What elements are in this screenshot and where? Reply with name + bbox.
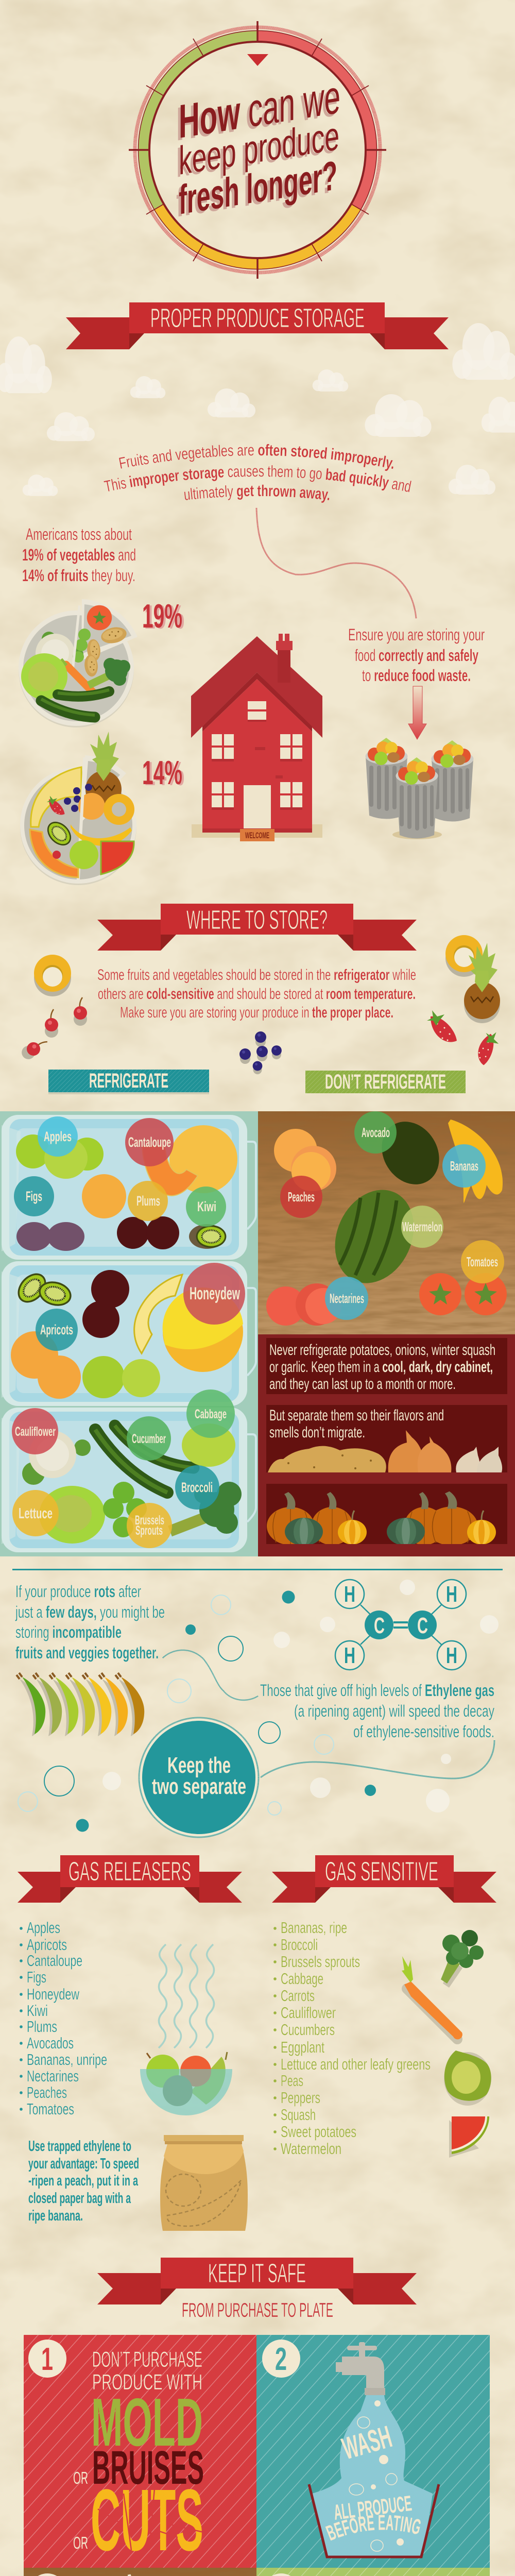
refrigerate labels: Plums: [136, 1193, 160, 1209]
banana ripening row: [16, 1673, 144, 1736]
don't refrigerate labels: [280, 1111, 504, 1320]
title: [176, 70, 340, 226]
title: How can we: [179, 70, 340, 148]
intro curved text: This improper storage causes them to go bad quickly and: [104, 465, 411, 493]
paragraph: where to store: [97, 967, 416, 1021]
title: keep produce: [179, 113, 339, 183]
list: gas sensitive: Carrots: [281, 1987, 315, 2005]
dotted divider: [12, 1569, 503, 1570]
icon: carrot: [402, 1956, 462, 2039]
list: gas releasers: Tomatoes: [27, 2100, 74, 2118]
don't refrigerate labels: Watermelon: [402, 1219, 442, 1234]
pointer triangle: [247, 54, 268, 66]
banner: proper produce storage: [66, 302, 449, 349]
list: gas sensitive: Cabbage: [281, 1970, 323, 1988]
icon: pear slice: [444, 2050, 491, 2106]
panel 1: don't purchase: PRODUCE WITH: [92, 2370, 202, 2395]
list: gas sensitive: Broccoli: [281, 1936, 318, 1954]
callout: keep the two separate: Keep the: [167, 1753, 231, 1778]
panel 1: don't purchase: BRUISES: [92, 2442, 204, 2494]
text: ethylene gas: [260, 1681, 494, 1741]
list: gas releasers: Figs: [27, 1968, 46, 1986]
scattered fruit right: [427, 935, 507, 1066]
potatoes onions garlic: [268, 1430, 502, 1472]
list: gas sensitive: Squash: [281, 2106, 316, 2124]
list: gas sensitive: Lettuce and other leafy greens: [281, 2055, 431, 2073]
list: gas sensitive: Sweet potatoes: [281, 2123, 356, 2141]
clouds: [0, 323, 515, 496]
banner: where to store: [97, 904, 417, 951]
title gauge ring: [129, 21, 386, 279]
panel 1: don't purchase: OR: [73, 2468, 88, 2487]
welcome mat: WELCOME: [245, 831, 269, 840]
paragraph: where to store: Make sure you are storing your produce in the proper place.: [120, 1004, 393, 1021]
list: gas releasers: Honeydew: [27, 1985, 79, 2003]
ethylene molecule: H: [344, 1643, 355, 1668]
tip: trapped ethylene: Use trapped ethylene to: [28, 2138, 131, 2155]
stat 14%: 14%: [144, 755, 184, 792]
list: gas releasers: Apricots: [27, 1936, 67, 1954]
refrigerate labels: Cabbage: [195, 1407, 227, 1421]
list: gas releasers: Apples: [27, 1919, 60, 1937]
ethylene molecule: H: [446, 1643, 457, 1668]
list: gas releasers: Plums: [27, 2018, 57, 2036]
gas vapour waves: [159, 1944, 214, 2048]
tip: trapped ethylene: ripe banana.: [28, 2208, 83, 2224]
don't refrigerate labels: Avocado: [362, 1125, 390, 1140]
panel 1: don't purchase: DON’T PURCHASE: [92, 2347, 202, 2372]
text: produce rots: storing incompatible: [15, 1623, 122, 1641]
stat 19%: 19%: [144, 598, 184, 636]
arrow down: [408, 686, 426, 739]
list: gas sensitive: Peas: [281, 2072, 303, 2090]
button: refrigerate: [48, 1070, 209, 1094]
panel 1: don't purchase: OR: [73, 2533, 88, 2552]
panel 2: wash: ALL PRODUCE: [332, 2491, 413, 2524]
fruit plate: [20, 732, 136, 885]
don't refrigerate labels: Peaches: [288, 1189, 315, 1205]
tip: trapped ethylene: -ripen a peach, put it in a: [28, 2173, 139, 2189]
list: gas releasers: Peaches: [27, 2083, 67, 2102]
text: produce rots: fruits and veggies together.: [15, 1643, 159, 1662]
cabinet text: [269, 1342, 495, 1441]
text: produce rots: just a few days, you might be: [15, 1603, 165, 1621]
text: americans toss: 14% of fruits they buy.: [22, 566, 135, 585]
panel: cabinet: [258, 1334, 515, 1556]
refrigerate labels: Honeydew: [190, 1284, 240, 1303]
callout: keep the two separate: [139, 1718, 259, 1837]
title: How can we: [176, 72, 338, 151]
refrigerate labels: Cauliflower: [15, 1425, 56, 1439]
title: fresh longer?: [179, 152, 337, 224]
text: americans toss: 19% of vegetables and: [22, 546, 136, 564]
title: fresh longer?: [176, 155, 335, 226]
refrigerate labels: Lettuce: [19, 1505, 53, 1522]
stat 14%: 14%: [142, 754, 182, 791]
intro curved text: [104, 444, 411, 503]
ethylene molecule: C: [374, 1613, 385, 1638]
panel 2: wash: [256, 2335, 490, 2568]
cabinet text: smells don’t migrate.: [269, 1424, 365, 1441]
list: gas releasers: Cantaloupe: [27, 1952, 82, 1970]
refrigerate labels: Apricots: [40, 1322, 73, 1337]
text: americans toss: [22, 525, 136, 585]
refrigerate labels: Kiwi: [197, 1199, 216, 1214]
banner: gas releasers: GAS RELEASERS: [68, 1857, 191, 1887]
water: [312, 2395, 433, 2556]
connector 2: [261, 1740, 494, 1778]
banner: where to store: WHERE TO STORE?: [186, 905, 328, 935]
house: [191, 634, 322, 841]
drawer 2 produce: [11, 1268, 243, 1399]
list: gas releasers: Nectarines: [27, 2067, 79, 2085]
faucet: [336, 2342, 385, 2395]
refrigerate labels: Cantaloupe: [128, 1134, 171, 1150]
panel 4: fridge: [256, 2568, 490, 2576]
paragraph: where to store: Some fruits and vegetables should be stored in the refrigerator while: [97, 967, 416, 984]
floating gas bubbles: [18, 1580, 499, 1832]
ethylene molecule: H: [344, 1582, 355, 1607]
welcome mat: [240, 829, 274, 841]
button: don't refrigerate: [305, 1071, 466, 1093]
refrigerate labels: [12, 1116, 245, 1548]
icon: broccoli: [441, 1930, 484, 1988]
banner: gas releasers: [18, 1855, 242, 1903]
list: gas sensitive: Eggplant: [281, 2038, 324, 2056]
trash cans: [366, 738, 474, 839]
refrigerate labels: Figs: [26, 1189, 42, 1204]
ethylene molecule: [335, 1580, 466, 1670]
scattered fruit left: [19, 955, 87, 1062]
panel 2: wash: BEFORE EATING: [325, 2515, 421, 2541]
panel 1: don't purchase: [24, 2335, 256, 2569]
list: gas sensitive: Cauliflower: [281, 2004, 336, 2022]
tip: trapped ethylene: your advantage: To speed: [28, 2156, 139, 2172]
panel 2: wash: WASH: [338, 2419, 396, 2466]
banner: keep it safe: KEEP IT SAFE: [208, 2259, 306, 2289]
list: gas sensitive: Brussels sprouts: [281, 1953, 360, 1971]
title: keep produce: [176, 115, 337, 186]
subheading: FROM PURCHASE TO PLATE: [182, 2299, 333, 2321]
refrigerate labels: Broccoli: [181, 1480, 213, 1495]
ethylene molecule: C: [417, 1613, 428, 1638]
intro curved text: Fruits and vegetables are often stored improperly.: [119, 444, 393, 471]
panel 1: don't purchase: MOLD: [91, 2384, 203, 2460]
tip: trapped ethylene: [28, 2138, 139, 2224]
don't refrigerate labels: Bananas: [450, 1158, 478, 1174]
paper bag: [160, 2135, 248, 2231]
list: gas sensitive: Cucumbers: [281, 2021, 335, 2039]
tip: trapped ethylene: closed paper bag with a: [28, 2190, 131, 2207]
list: gas releasers: Kiwi: [27, 2002, 48, 2020]
list: gas sensitive: Watermelon: [281, 2140, 341, 2158]
button: refrigerate: REFRIGERATE: [89, 1070, 168, 1092]
panel: refrigerate drawers: [0, 1111, 258, 1556]
stat 19%: 19%: [142, 597, 182, 635]
drawer 3 produce: [22, 1423, 242, 1544]
panel: wood counter: [258, 1111, 515, 1334]
refrigerate labels: Sprouts: [135, 1523, 163, 1538]
pumpkins: [266, 1492, 507, 1556]
callout: keep the two separate: two separate: [152, 1774, 246, 1799]
banner: keep it safe: [97, 2258, 417, 2304]
panel 1: don't purchase: 1: [41, 2342, 53, 2377]
don't refrigerate labels: Nectarines: [330, 1291, 364, 1306]
paragraph: where to store: others are cold-sensitive and should be stored at room temperature.: [98, 986, 416, 1003]
text: produce rots: If your produce rots after: [15, 1582, 141, 1601]
fruit bowl: [140, 2052, 232, 2115]
dotted connector: [256, 508, 416, 618]
icon: watermelon slice: [449, 2116, 489, 2158]
intro curved text: ultimately get thrown away.: [184, 484, 330, 503]
list: gas sensitive: [273, 1919, 431, 2158]
panel 1: don't purchase: CUTS: [91, 2471, 203, 2569]
list: gas sensitive: Peppers: [281, 2089, 320, 2107]
stat 19%: [142, 597, 184, 636]
vegetable plate: [19, 599, 138, 727]
drawer 1 produce: [16, 1125, 237, 1251]
list: gas releasers: Avocados: [27, 2034, 74, 2052]
refrigerate labels: Apples: [44, 1129, 72, 1144]
stat 14%: [142, 754, 184, 792]
panel 3: separate: [24, 2567, 256, 2576]
text: americans toss: Americans toss about: [26, 525, 132, 544]
text: produce rots: [15, 1582, 165, 1662]
banner: gas sensitive: [272, 1855, 496, 1903]
ethylene molecule: H: [446, 1582, 457, 1607]
list: gas releasers: Bananas, unripe: [27, 2050, 107, 2069]
list: gas sensitive: Bananas, ripe: [281, 1919, 347, 1937]
text: ensure storing: [348, 625, 485, 685]
scattered blueberries: [239, 1031, 282, 1074]
refrigerate labels: Cucumber: [132, 1432, 166, 1446]
panel 2: wash: 2: [275, 2342, 287, 2377]
connector 1: [163, 1650, 258, 1700]
list: gas releasers: [20, 1919, 107, 2118]
refrigerate labels: Brussels: [135, 1513, 164, 1528]
